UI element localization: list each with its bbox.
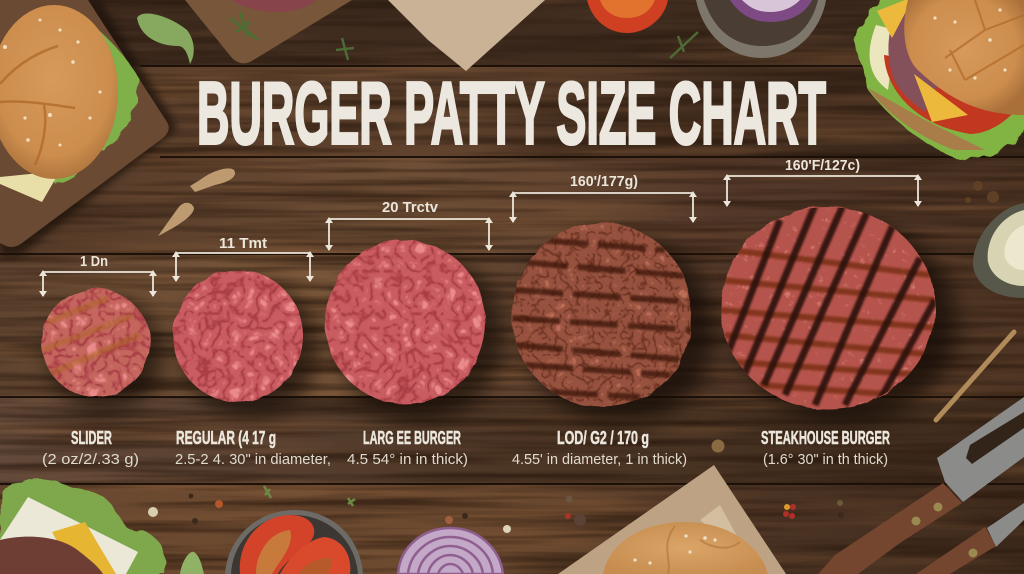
dimension: half pound arrow: 160'/177g) xyxy=(570,173,638,190)
label: half pound xyxy=(512,428,687,468)
label: steakhouse burger: STEAKHOUSE BURGER xyxy=(761,428,890,448)
icon: onion bottom xyxy=(398,528,503,574)
icon: top bun with sesame xyxy=(0,5,118,179)
icon: wooden pestle sticks xyxy=(158,168,235,236)
panel: burger top right xyxy=(852,0,1024,160)
patty: large burger xyxy=(325,240,505,421)
dimension: regular arrow xyxy=(172,235,314,282)
icon: herb sprig right of board xyxy=(336,38,354,60)
icon: herb leaf xyxy=(137,14,194,64)
label: steakhouse burger xyxy=(761,428,890,468)
label: half pound: LOD/ G2 / 170 g xyxy=(557,428,649,448)
label: slider: (2 oz/2/.33 g) xyxy=(42,451,139,468)
label: half pound: 4.55' in diameter, 1 in thick) xyxy=(512,451,687,468)
dimension: steakhouse arrow: 160'F/127c) xyxy=(785,157,860,174)
icon: cheese slice xyxy=(0,171,60,202)
icon: tomatoes in bowl bottom xyxy=(225,510,363,574)
dimension: regular arrow: 11 Tmt xyxy=(219,235,267,252)
icon: tomato slice xyxy=(884,55,1014,134)
panel: small board top xyxy=(185,0,352,63)
panel: cutting board with burger top left xyxy=(0,0,178,256)
icon: peppercorn bottom xyxy=(712,440,724,452)
icon: peppercorns right xyxy=(965,181,999,203)
icon: wooden skewer xyxy=(936,332,1014,420)
label: large burger xyxy=(347,428,468,468)
label: slider: SLIDER xyxy=(71,428,112,448)
label: large burger: LARG EE BURGER xyxy=(363,428,461,448)
icon: scattered spices xyxy=(148,486,844,533)
icon: small lettuce piece xyxy=(180,552,204,574)
icon: patty xyxy=(888,8,950,112)
label: regular xyxy=(175,428,331,468)
dimension: steakhouse arrow xyxy=(723,157,922,207)
icon: patty on board xyxy=(232,0,316,12)
icon: herb sprig xyxy=(230,12,258,40)
label: regular: REGULAR (4 17 g xyxy=(176,428,276,448)
dimension: slider arrow xyxy=(39,253,157,297)
icon: sauce jar right xyxy=(973,203,1024,298)
icon: lettuce xyxy=(40,16,140,184)
label: regular: 2.5-2 4. 30" in diameter, xyxy=(175,451,331,468)
label: large burger: 4.5 54° in in thick) xyxy=(347,451,468,468)
icon: cheese lower xyxy=(914,74,968,122)
icon: parchment paper top xyxy=(388,0,545,71)
icon: bun on parchment bottom xyxy=(558,465,786,574)
patty: regular xyxy=(173,270,320,418)
icon: tongs handle xyxy=(916,527,996,574)
dimension: large arrow xyxy=(325,199,493,251)
icon: herb sprig by jar xyxy=(670,32,698,58)
patty: slider xyxy=(42,289,164,412)
dimension: slider arrow: 1 Dn xyxy=(80,253,108,270)
dimension: large arrow: 20 Trctv xyxy=(382,199,439,216)
patty: half pound xyxy=(512,223,715,424)
dimension: half pound arrow xyxy=(509,173,697,223)
label: steakhouse burger: (1.6° 30" in th thick) xyxy=(763,451,888,468)
icon: top bun xyxy=(904,0,1024,115)
icon: spatula and tongs xyxy=(818,397,1024,574)
icon: cheese top xyxy=(877,0,912,38)
label: slider xyxy=(42,428,139,468)
icon: glass jar with onion xyxy=(696,0,826,58)
icon: bottom bun edge xyxy=(868,88,985,150)
icon: spatula handle xyxy=(818,483,962,574)
icon: lettuce and burger bottom left xyxy=(0,477,165,574)
patty: steakhouse burger xyxy=(720,205,957,424)
icon: tomato top xyxy=(587,0,668,33)
icon: cream sauce xyxy=(870,25,896,90)
